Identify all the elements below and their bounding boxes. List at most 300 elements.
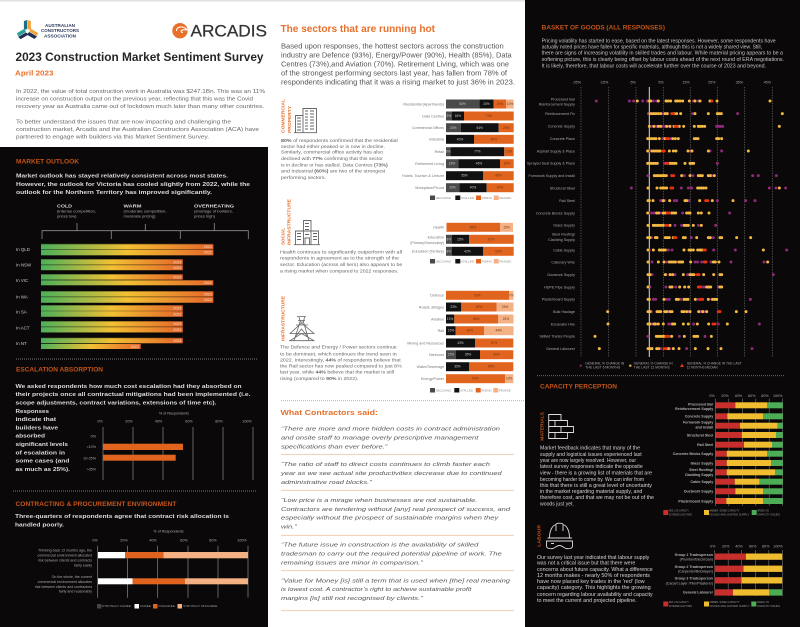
chart: materials capacity: Ductwork Supply <box>684 490 713 494</box>
contracting summary: handled poorly. <box>15 522 64 528</box>
icon: bricks <box>549 414 574 438</box>
chart: contract risk allocation: 0% <box>92 538 98 542</box>
label: commercial property <box>280 99 292 133</box>
chart: price change dot plot: Steel Roofing/ <box>552 233 576 237</box>
label: social infrastructure <box>280 199 291 245</box>
chart: labour capacity: 20% <box>722 545 730 549</box>
chart: labour capacity: 0% <box>710 545 716 549</box>
escalation summary: their projects once all contractual mitigations had been implemented (i.e. <box>16 392 251 398</box>
logo: Arcadis: ARCADIS <box>190 22 267 41</box>
chart: state outlook bars: 2023 <box>173 260 182 264</box>
chart: price change dot plot: -5% <box>629 81 637 85</box>
chart: state outlook bars: In ACT <box>16 325 30 330</box>
labour text: Our survey last year indicated that labour supply <box>537 555 650 561</box>
chart: commercial property sectors: 73% <box>486 114 492 118</box>
chart: commercial property sectors: 23% <box>503 126 510 130</box>
chart: infrastructure sectors: 52% <box>476 305 482 309</box>
heading: what contractors said: What Contractors said: <box>280 408 378 417</box>
chart: infrastructure sectors: Mining and Resources <box>407 341 444 345</box>
escalation summary: builders have <box>16 425 59 431</box>
market outlook summary <box>16 173 251 196</box>
legend: agreement: AGREE <box>140 604 151 608</box>
legend: materials capacity: AMBER: SOME CAPACITY <box>710 508 740 512</box>
heading: escalation absorption: ESCALATION ABSORPTION <box>16 366 103 374</box>
chart: contract risk allocation: risk between clients and contractors <box>35 585 92 589</box>
materials text: in the market regarding material supply, and <box>540 489 642 495</box>
commercial text: sector had either peaked or is now in decline. <box>281 144 385 149</box>
chart: social infrastructure sectors: 42% <box>464 249 471 253</box>
chart: infrastructure sectors: 10% <box>506 377 513 381</box>
heading: sectors running hot: The sectors that are running hot <box>280 24 436 35</box>
chart: commercial property sectors: 9% <box>446 114 451 118</box>
legend: infrastructure: RISING <box>481 388 493 392</box>
chart: infrastructure sectors: 42% <box>467 329 473 333</box>
legend: materials capacity: GREEN: NO <box>757 508 770 512</box>
legend: commercial: DECLINING <box>436 196 452 200</box>
legend: materials capacity: RED: LOW CAPACITY, <box>669 508 689 512</box>
chart: price change dot plot: Cladding Supply <box>548 238 575 242</box>
legend: price change: 12 MONTHS MEDIAN <box>687 366 718 370</box>
escalation summary: absorbed <box>16 434 45 440</box>
chart: labour capacity: (Carpenter/Bricklayer) <box>678 570 713 574</box>
chart: infrastructure sectors: 7% <box>509 293 514 297</box>
section: infrastructure <box>280 291 514 392</box>
chart: materials capacity: 100% <box>773 394 783 398</box>
social text: respondents in agreement as to the strength of the <box>280 256 399 261</box>
chart: commercial property sectors: Workplace/Fit-out <box>415 186 444 190</box>
chart: state outlook bars: In NSW <box>16 262 32 268</box>
labour text: capacity) category. This highlights the growing <box>537 585 651 591</box>
quote 4: remaining issues are minor in comparison.” <box>281 561 424 567</box>
chart: commercial property sectors: 55% <box>461 174 468 178</box>
panel: the sectors that are running hot <box>280 24 515 392</box>
chart: infrastructure sectors: Harbours <box>429 353 444 357</box>
legend: price change: GENERAL % CHANGE IN THE LAST <box>687 362 742 366</box>
legend: social: STALLED <box>461 259 474 263</box>
chart: commercial property sectors: 15% <box>506 150 512 154</box>
social text <box>280 250 403 273</box>
chart: state outlook bars: In QLD <box>16 247 30 252</box>
chart: escalation absorbed: >35% <box>86 467 97 471</box>
chart: infrastructure sectors: 35% <box>454 365 461 369</box>
chart: infrastructure sectors: 43% <box>457 341 464 345</box>
labour text: was not a critical issue but that there were <box>537 560 635 566</box>
labour text: have now placed key trades in the 'red' (low <box>537 579 645 585</box>
panel: capacity perception <box>537 384 783 608</box>
chart: state outlook bars: 2023 <box>173 339 182 343</box>
chart: commercial property sectors: 60% <box>491 137 497 141</box>
chart: price change dot plot: Reinforcement Supply <box>539 102 575 106</box>
labour text: concerns about future capacity. What a difference <box>537 567 653 573</box>
chart: contract risk allocation: 40% <box>149 538 157 542</box>
chart: materials capacity: Rail Steel <box>697 443 713 447</box>
quote 3: Contractors are tendering without [any] real prospect of success, and <box>281 507 511 513</box>
escalation summary: as much as 25%). <box>16 467 70 473</box>
basket text: actually noted prices have fallen for specific materials, although this is not a widely shared view. Still, <box>542 44 762 50</box>
chart: contract risk allocation: % of Respondents <box>153 529 184 533</box>
chart: price change dot plot: Asphalt Supply & Place <box>537 149 575 153</box>
chart: contract risk allocation: commercial environment allocated <box>37 553 92 557</box>
section: commercial property <box>280 99 514 200</box>
commercial text: declined with 77% confirming that this sector <box>281 156 383 161</box>
label: commercial property: COMMERCIAL <box>280 99 285 133</box>
chart: commercial property sectors: 20% <box>449 186 456 190</box>
sectors intro text: Based upon responses, the hottest sectors across the construction <box>281 43 504 50</box>
escalation summary: of escalation in <box>16 450 65 456</box>
chart: price change dot plot: Bulk Haulage <box>553 310 575 314</box>
chart: escalation absorbed: <10% <box>86 445 97 449</box>
chart: infrastructure sectors: 65% <box>473 317 480 321</box>
chart: commercial property sectors: 18% <box>455 114 461 118</box>
chart: materials capacity: Plasterboard Supply <box>678 499 713 503</box>
labour text: concern regarding labour availability and capacity <box>537 592 653 598</box>
chart: price change dot plot: 25% <box>708 81 716 85</box>
legend: price change: THE LAST 12 MONTHS <box>634 366 671 370</box>
infrastructure text: last year, while 44% believe that the market is still <box>280 370 394 375</box>
legend: labour capacity: GREEN: NO <box>757 600 770 604</box>
chart: price change dot plot: HDPE Pipe Supply <box>544 285 575 289</box>
heading: capacity perception: CAPACITY PERCEPTION <box>540 384 617 391</box>
chart: materials capacity: Concrete Bricks Supply <box>673 452 713 456</box>
contracting summary <box>15 514 230 528</box>
escalation summary: scope adjustments, contract variations, extensions of time etc). <box>16 400 217 406</box>
quote 3 <box>281 498 511 531</box>
chart: escalation absorbed: % of Respondents <box>159 411 189 415</box>
chart: infrastructure sectors: 23% <box>450 305 457 309</box>
chart: commercial property sectors: 40% <box>497 186 503 190</box>
sectors intro text: of the strongest performing sectors last year, has fallen from 78% of <box>281 70 507 77</box>
chart: escalation absorbed: 10-25% <box>83 456 97 460</box>
scale legend: cold, warm, overheating: OVERHEATING <box>194 203 234 208</box>
chart: contract risk allocation: On the whole, the current <box>52 575 92 579</box>
chart: commercial property sectors: 20% <box>497 102 503 106</box>
chart: commercial property sectors: 40% <box>457 137 463 141</box>
label: commercial property: PROPERTY <box>287 105 292 133</box>
quote 3: win.” <box>281 525 298 531</box>
chart: infrastructure sectors: Aviation <box>431 317 444 321</box>
chart: state outlook bars: 2023 <box>173 307 182 311</box>
chart: materials capacity: 80% <box>761 394 769 398</box>
chart: materials capacity: 60% <box>748 394 756 398</box>
chart: state outlook bars: 2022 <box>173 312 182 316</box>
chart: social infrastructure sectors: 25% <box>457 237 464 241</box>
legend: agreement: STRONGLY DISAGREE <box>183 604 218 608</box>
chart: labour capacity: 60% <box>749 545 757 549</box>
chart: commercial property sectors: 54% <box>477 126 483 130</box>
escalation summary: some cases (and <box>16 459 70 465</box>
chart: price change dot plot: Plasterboard Supply <box>542 298 575 302</box>
legend: social <box>430 259 511 264</box>
chart: state outlook bars: 2022 <box>204 251 212 255</box>
quote 1: specifications than ever before.” <box>281 445 389 451</box>
legend: labour capacity: CAPACITY ISSUES <box>757 604 780 608</box>
panel: escalation absorption <box>16 366 253 480</box>
chart: commercial property sectors: 46% <box>476 162 482 166</box>
scale legend: cold, warm, overheating: COLD <box>57 203 73 208</box>
chart: materials capacity: Glass Supply <box>691 461 713 465</box>
quote 2: administrative road blocks.” <box>281 480 373 486</box>
basket text: Pricing volatility has started to ease, based on the latest responses. However, some respondents have <box>542 38 776 44</box>
chart: social infrastructure sectors <box>410 223 514 264</box>
chart: labour capacity: 40% <box>735 545 743 549</box>
chart: commercial property sectors: Data Centres <box>422 114 444 118</box>
chart: commercial property sectors: Commercial Offices <box>412 126 444 130</box>
legend: labour capacity: AMBER: SOME CAPACITY <box>710 600 740 604</box>
quote 5: margins [is] still not recognised by clients.” <box>281 596 424 602</box>
chart: social infrastructure sectors: Education (Tertiary) <box>412 250 444 254</box>
materials text: woods just yet. <box>540 502 574 508</box>
chart: materials capacity: Cable Supply <box>691 480 713 484</box>
chart: price change dot plot: Structural Steel <box>550 186 575 190</box>
section: social infrastructure <box>280 199 514 273</box>
chart: materials capacity: and Install <box>696 425 713 429</box>
chart: escalation absorbed: 0% <box>91 434 97 438</box>
materials text: supply and logistical issues experienced last <box>540 452 642 458</box>
chart: commercial property sectors: 45% <box>495 174 502 178</box>
chart: labour capacity <box>663 545 783 608</box>
chart: social infrastructure sectors: (Primary/Secondary) <box>410 241 444 245</box>
heading: contracting and procurement: CONTRACTING & PROCUREMENT ENVIRONMENT <box>16 501 177 508</box>
labour text: 12 months makes - nearly 50% of respondents <box>537 573 650 579</box>
chart: infrastructure sectors: 65% <box>488 365 495 369</box>
chart: commercial property sectors: 20% <box>483 102 490 106</box>
chart: escalation absorbed: 20% <box>125 420 133 424</box>
chart: state outlook bars: In NT <box>16 341 27 346</box>
quote 1: and onsite staff to manage overly prescriptive management <box>281 436 479 442</box>
legend: social: PEAKED <box>499 259 511 263</box>
sectors intro text <box>281 43 515 86</box>
intro text: increase on construction output on the previous year, reflecting that this was the Covid <box>16 97 253 103</box>
chart: contract risk allocation: fairly and reasonably <box>59 590 92 594</box>
chart: materials capacity: Structural Steel <box>687 433 713 437</box>
chart: infrastructure sectors: 35% <box>465 353 471 357</box>
escalation summary: significant levels <box>16 442 69 448</box>
materials text: Market feedback indicates that many of the <box>540 446 640 452</box>
chart: infrastructure sectors: 15% <box>448 329 454 333</box>
quote 5: “Value for Money [is] still a term that is used when [the] real meaning <box>281 578 511 584</box>
materials text: this that there is still a great level of uncertainty <box>540 483 652 489</box>
social text: a rising market when compared to 2022 responses. <box>280 268 398 273</box>
quote 4: “The future issue in construction is the availability of skilled <box>281 543 480 549</box>
quote 1: “There are more and more hidden costs in contract administration <box>281 427 500 433</box>
chart: state outlook bars: 2022 <box>204 298 212 302</box>
legend: commercial: PEAKED <box>499 196 511 200</box>
chart: infrastructure sectors: 50% <box>493 353 500 357</box>
icon: hard hat and goggles <box>546 523 572 549</box>
quote 2: year as we see actual site productivities decrease due to continued <box>280 471 503 477</box>
sectors intro text: industry are Defence (93%), Energy/Power (90%), Health (85%), Data <box>281 52 512 59</box>
chart: contract risk allocation: commercial environment allocates <box>38 580 92 584</box>
chart: commercial property sectors: Retirement Living <box>415 162 444 166</box>
chart: commercial property sectors: 40% <box>470 186 476 190</box>
chart: labour capacity: General Labourer <box>683 591 714 595</box>
chart: social infrastructure sectors: 15% <box>503 225 510 229</box>
materials text: view - there is a growing list of materials that are <box>540 470 652 476</box>
chart: state outlook bars: 2022 <box>131 345 139 349</box>
chart: materials capacity: 40% <box>735 394 743 398</box>
commercial text <box>281 138 398 180</box>
chart: infrastructure sectors <box>407 291 514 392</box>
legend: price change: GENERAL % CHANGE IN <box>634 362 673 366</box>
chart: price change dot plot: 15% <box>682 81 690 85</box>
chart: infrastructure sectors: 13% <box>447 317 453 321</box>
escalation summary: indicate that <box>16 417 56 423</box>
chart: materials capacity: Reinforcement Supply <box>675 407 713 411</box>
chart: materials capacity <box>663 394 783 516</box>
chart: contract risk allocation <box>35 529 248 608</box>
chart: price change dot plot: Sprayed Seal Supply & Place <box>527 162 575 166</box>
chart: materials capacity: 20% <box>721 394 729 398</box>
logo: Australian Constructors Association: CONSTRUCTORS <box>41 28 79 33</box>
chart: state outlook bars <box>16 244 213 349</box>
chart: price change dot plot <box>527 81 787 370</box>
sectors intro text: Centres (73%),and Aviation (70%). Retirement Living, which was one <box>281 61 509 68</box>
chart: social infrastructure sectors: 50% <box>495 249 502 253</box>
chart: contract risk allocation: Thinking back 12 months ago, the <box>38 548 92 552</box>
chart: price change dot plot: Processed Bar <box>551 97 576 101</box>
icon: transmission tower <box>289 316 314 341</box>
chart: materials capacity: 0% <box>709 394 715 398</box>
chart: contract risk allocation: 80% <box>209 538 217 542</box>
chart: contract risk allocation: 100% <box>237 538 247 542</box>
chart: social infrastructure sectors: Health <box>433 226 444 230</box>
legend: agreement <box>97 604 218 608</box>
chart: price change dot plot: Ductwork Supply <box>547 273 575 277</box>
chart: state outlook bars: In WA <box>16 294 28 300</box>
commercial text: Similarly, commercial office activity has also <box>281 150 383 155</box>
chart: price change dot plot: Skilled Trades People <box>539 335 575 339</box>
chart: contract risk allocation: fairly easily <box>74 563 92 567</box>
scale legend: cold, warm, overheating: (shortage of builders, <box>194 209 233 213</box>
title: 2023 Construction Market Sentiment Survey <box>16 52 264 64</box>
chart: price change dot plot: General Labourer <box>546 347 576 351</box>
label: social infrastructure: INFRASTRUCTURE <box>286 199 291 245</box>
legend: price change: GENERAL % CHANGE IN <box>585 362 625 366</box>
quote 1 <box>281 427 500 451</box>
chart: price change dot plot: 5% <box>658 81 664 85</box>
labour text: to meet the current and projected pipeline. <box>537 598 637 604</box>
chart: infrastructure sectors: 15% <box>448 353 454 357</box>
chart: price change dot plot: Rail Steel <box>559 199 575 203</box>
chart: commercial property sectors: 18% <box>449 162 455 166</box>
chart: escalation absorbed: 0% <box>97 420 103 424</box>
legend: agreement: DISAGREE <box>158 604 175 608</box>
chart: contract risk allocation: 60% <box>180 538 188 542</box>
chart: escalation absorbed: 60% <box>185 420 193 424</box>
date: April 2023 <box>15 70 54 77</box>
legend: commercial: RISING <box>482 196 493 200</box>
chart: state outlook bars: In SA <box>16 310 27 314</box>
labour text <box>537 555 653 604</box>
chart: infrastructure sectors: 93% <box>474 293 481 297</box>
chart: price change dot plot: Reinforcement Fix <box>545 112 575 116</box>
chart: price change dot plot: Formwork Supply and Install <box>528 174 575 178</box>
sectors intro text: respondents indicating that it was a rising market to just 36% in 2023. <box>281 79 515 86</box>
intro text: construction market, Arcadis and the Australian Constructors Association (ACA) have <box>16 127 259 133</box>
chart: infrastructure sectors: 25% <box>502 305 508 309</box>
scale legend: cold, warm, overheating: (intense competition, <box>57 209 96 213</box>
chart: price change dot plot: 45% <box>764 81 772 85</box>
chart: price change dot plot: Concrete Place <box>550 137 575 141</box>
chart: labour capacity: 80% <box>762 545 770 549</box>
chart: social infrastructure sectors: 67% <box>488 237 495 241</box>
chart: commercial property sectors: 36% <box>504 162 510 166</box>
scale legend: cold, warm, overheating: moderate pricing) <box>124 214 156 218</box>
chart: commercial property sectors: 6% <box>446 150 450 154</box>
legend: commercial <box>430 196 511 200</box>
chart: labour capacity: (Plumber/Electrician) <box>680 558 713 562</box>
infrastructure text: The Defence and Energy / Power sectors continue <box>280 345 397 350</box>
chart: escalation absorbed: 80% <box>215 420 223 424</box>
chart: state outlook bars: In VIC <box>16 278 28 283</box>
chart: price change dot plot: Concrete Supply <box>548 125 575 129</box>
chart: price change dot plot: -25% <box>572 81 582 85</box>
basket text: there are signs of increasing volatility in skilled trades and labour. While material pricing appears to be a <box>542 51 783 57</box>
label: infrastructure: INFRASTRUCTURE <box>280 296 285 341</box>
chart: labour capacity: 100% <box>773 545 783 549</box>
chart: state outlook bars: 2022 <box>173 266 182 270</box>
chart: commercial property sectors: Residential (Apartments) <box>403 102 444 106</box>
legend: social: RISING <box>482 259 493 263</box>
intro text: In 2022, the value of total construction work in Australia was $247.1Bn. This was an 11% <box>16 89 265 95</box>
chart: commercial property sectors: 77% <box>474 150 481 154</box>
chart: infrastructure sectors: 90% <box>472 377 479 381</box>
chart: infrastructure sectors: Defence <box>430 294 444 298</box>
scale legend: cold, warm, overheating: prices high) <box>194 214 215 218</box>
chart: escalation absorbed: 40% <box>155 420 163 424</box>
market outlook summary: outlook for the Northern Territory has improved significantly. <box>16 190 212 196</box>
infrastructure text: the Rail sector has now peaked compared to just 8% <box>280 364 402 369</box>
chart: materials capacity: Processed Bar <box>688 402 714 406</box>
chart: infrastructure sectors: Energy/Power <box>421 377 445 381</box>
label: labour: LABOUR <box>537 524 543 547</box>
infrastructure text: to be dominant, which continues the trend seen in <box>280 351 397 356</box>
quote 3: especially without the prospect of sustainable margins when they <box>281 516 500 522</box>
infrastructure text: rising (compared to 90% in 2022). <box>280 376 358 381</box>
intro text: recovery year as Australia came out of lockdown much later than many other countries. <box>16 104 265 110</box>
quote 4 <box>281 543 502 567</box>
materials text: latest survey responses indicate the opposite <box>540 464 643 470</box>
chart: infrastructure sectors: Water/Sewerage <box>417 365 444 369</box>
escalation summary <box>16 384 251 473</box>
chart: escalation absorbed <box>83 411 253 480</box>
label: social infrastructure: SOCIAL <box>280 228 285 245</box>
chart: commercial property sectors: 50% <box>459 102 466 106</box>
legend: price change: THE LAST 6 MONTHS <box>585 366 621 370</box>
social text: Health continues to significantly outperform with all <box>280 250 402 255</box>
materials text <box>540 446 654 508</box>
legend: infrastructure <box>430 388 511 392</box>
contracting summary: Three-quarters of respondents agree that contract risk allocation is <box>15 514 230 520</box>
quote 2 <box>280 462 503 486</box>
chart: contract risk allocation: 20% <box>120 538 128 542</box>
legend: social: DECLINING <box>436 259 452 263</box>
chart: materials capacity: Formwork Supply <box>683 421 713 425</box>
chart: commercial property sectors: Retail <box>435 150 444 154</box>
legend: labour capacity: EXTENDED LEAD TIMES <box>669 604 692 608</box>
escalation summary: Responses <box>16 409 50 415</box>
logo: Australian Constructors Association: AUSTRALIAN <box>45 23 75 28</box>
legend: materials capacity: EXTENDED LEAD TIMES <box>669 512 692 516</box>
materials text: year are now largely resolved. However, our <box>540 458 636 464</box>
icon: office buildings <box>294 108 317 133</box>
infrastructure text <box>280 345 402 381</box>
quote 4: tradesman to carry out the required potential pipeline of work. The <box>281 552 502 558</box>
chart: state outlook bars: 2023 <box>173 322 182 326</box>
commercial text: is in decline or has stalled. Data Centres (73%) <box>281 163 388 168</box>
chart: price change dot plot: 35% <box>736 81 744 85</box>
panel: basket of goods <box>527 24 787 370</box>
